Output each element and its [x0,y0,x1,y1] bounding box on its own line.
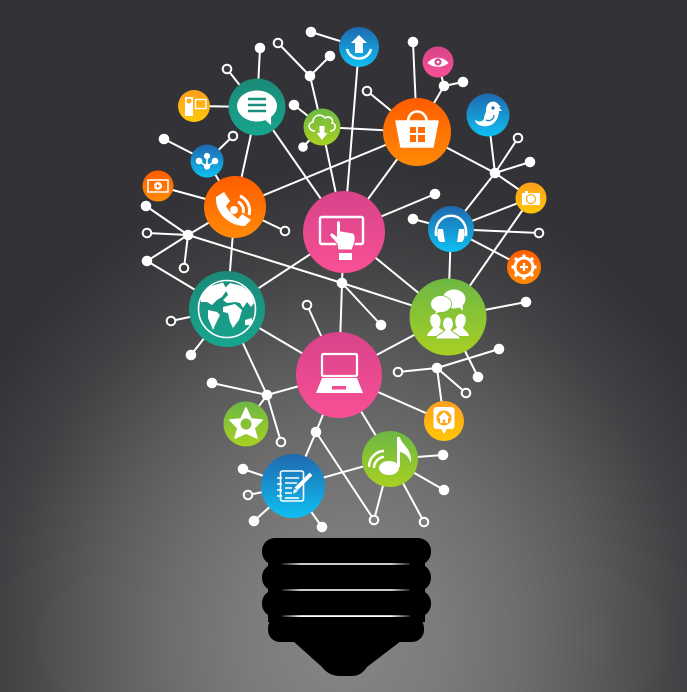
icon: gear with plus [512,254,536,280]
node: camcorder [178,90,210,122]
node: share [190,144,224,178]
icon: camera [522,191,540,205]
icon: camcorder [185,97,206,116]
icon: cloud [309,115,335,140]
icon: star [230,408,262,438]
icon: eye [428,58,448,67]
node: headphones [428,206,474,252]
icon: speech bubble [237,90,277,125]
node: touch screen [303,191,385,273]
icon: laptop [316,354,363,393]
node: community [410,278,486,356]
filled end nodes [141,27,535,532]
node: phone [204,176,266,238]
node: laptop [296,332,382,418]
node: notepad [261,454,325,518]
icon: home pin [434,407,454,434]
icon: people with speech bubbles [427,290,469,339]
node: video [142,170,174,202]
icon: world map [198,280,256,338]
connector lines [146,32,539,527]
icon: bird [475,102,502,126]
icon: headphones [436,216,466,242]
node: chat [228,78,286,136]
icon: notes and pen [277,471,311,501]
node: upload [339,27,379,67]
node: favourite star [224,402,268,446]
icon: video player [148,180,168,192]
node: globe [189,271,265,347]
icon: up arrow [347,35,371,59]
node: music [362,431,418,487]
ring end nodes [143,39,543,526]
node: shopping basket [383,98,451,166]
bulb base [262,538,431,676]
icon: music note [369,437,411,475]
icon: hand on screen [320,217,363,260]
node: camera [516,182,546,214]
node: gear [507,250,541,284]
node: eye [422,46,454,78]
icon: share network [196,153,218,169]
node: cloud download [304,108,340,146]
node: home [424,401,464,441]
node: bird [466,94,510,136]
icon: basket [396,112,438,147]
icon: phone with waves [216,192,251,226]
